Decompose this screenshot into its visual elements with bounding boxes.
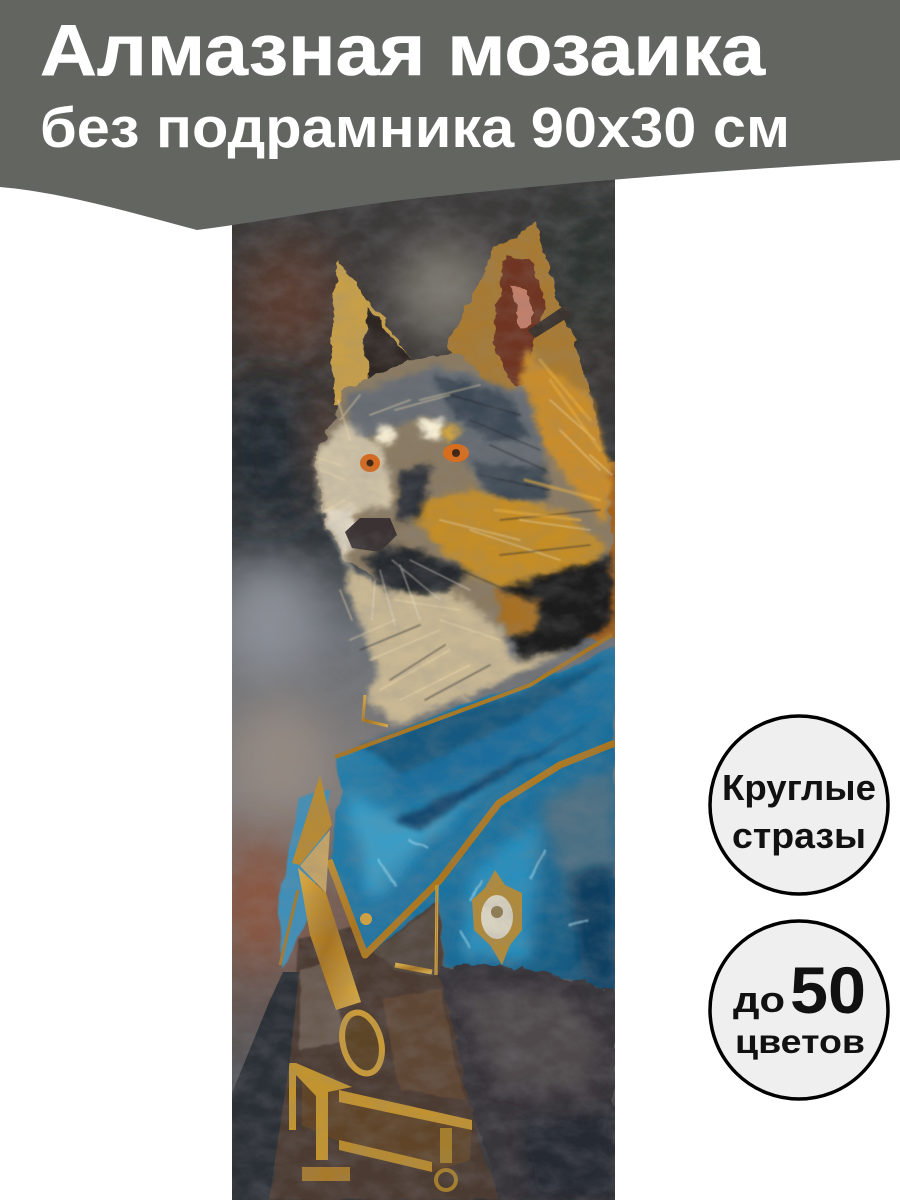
dark fur sleeve right (439, 965, 615, 1200)
ear: left (330, 262, 412, 405)
cape gold trim (329, 635, 615, 975)
gold shoulder strap (292, 775, 388, 1078)
dog group (315, 220, 618, 725)
badge: up to 50 colours: 50 (790, 953, 866, 1027)
badge: up to 50 colours (710, 921, 888, 1099)
title line 1: Алмазная мозаика (40, 11, 766, 91)
badge: round rhinestones (710, 716, 888, 894)
badge: up to 50 colours: до (733, 979, 785, 1020)
title banner (0, 0, 900, 230)
badge: round rhinestones: стразы (732, 815, 866, 856)
gold neck patch (495, 590, 540, 640)
painting: dog in blue cape (220, 170, 630, 1200)
painting background (220, 170, 630, 1200)
eye: left (360, 454, 380, 472)
dog nose (345, 518, 397, 552)
dog head (315, 350, 614, 625)
left blue sleeve (279, 790, 330, 970)
eye: right (443, 444, 469, 462)
cape rivet (360, 913, 372, 925)
title line 2: без подрамника 90х30 см (40, 96, 790, 160)
medal on cape (472, 870, 522, 965)
fur strokes (315, 360, 612, 700)
blue cape (329, 645, 615, 990)
fur on the back (582, 462, 615, 641)
ear: right (446, 221, 590, 395)
badge: up to 50 colours: цветов (735, 1023, 865, 1060)
dark fur sleeve left (232, 972, 299, 1200)
chest cream fur (345, 570, 570, 725)
left shoulder strap line (280, 890, 298, 965)
badge: round rhinestones: Круглые (722, 767, 876, 808)
ear pin (528, 305, 572, 338)
gold belt (289, 1063, 472, 1190)
dark neck shadow (500, 555, 612, 665)
muzzle shadow (362, 545, 470, 592)
leather armour (269, 900, 499, 1200)
painted texture (232, 170, 615, 1200)
